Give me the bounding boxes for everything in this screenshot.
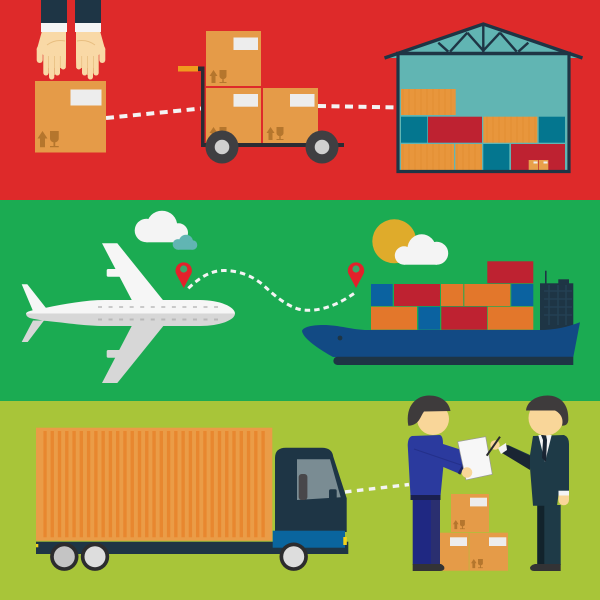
icon: location pin right [348, 262, 364, 288]
arrow: dashed route trolley to warehouse [318, 106, 397, 108]
arrow: dashed route truck to worker [345, 484, 409, 492]
arrow: dashed route box to trolley [106, 108, 201, 118]
icon: sun [372, 219, 416, 263]
icon: teal cloud [173, 235, 197, 250]
icon: cardboard box on floor [35, 81, 106, 152]
icon: white cloud over plane [135, 211, 188, 242]
icon: warehouse building [384, 24, 583, 173]
figure: man in suit [487, 396, 569, 571]
panel: lime delivery band [0, 401, 600, 600]
icon: location pin left [176, 262, 192, 288]
icon: delivered boxes [440, 494, 508, 571]
panel: red warehouse band [0, 0, 600, 200]
figure: worker in blue [408, 396, 492, 571]
icon: airplane [22, 243, 235, 383]
icon: container ship [302, 261, 580, 365]
icon: hand trolley with boxes [178, 31, 344, 164]
containers: warehouse stack [401, 89, 565, 170]
panel: green freight band [0, 200, 600, 401]
ship bridge tower [540, 271, 573, 331]
icon: container truck [36, 428, 348, 571]
containers: ship stack [371, 261, 533, 330]
icon: cloud over ship [395, 234, 448, 265]
icon: hands with sleeves [37, 0, 105, 80]
arrow: dashed flight route [188, 270, 356, 310]
